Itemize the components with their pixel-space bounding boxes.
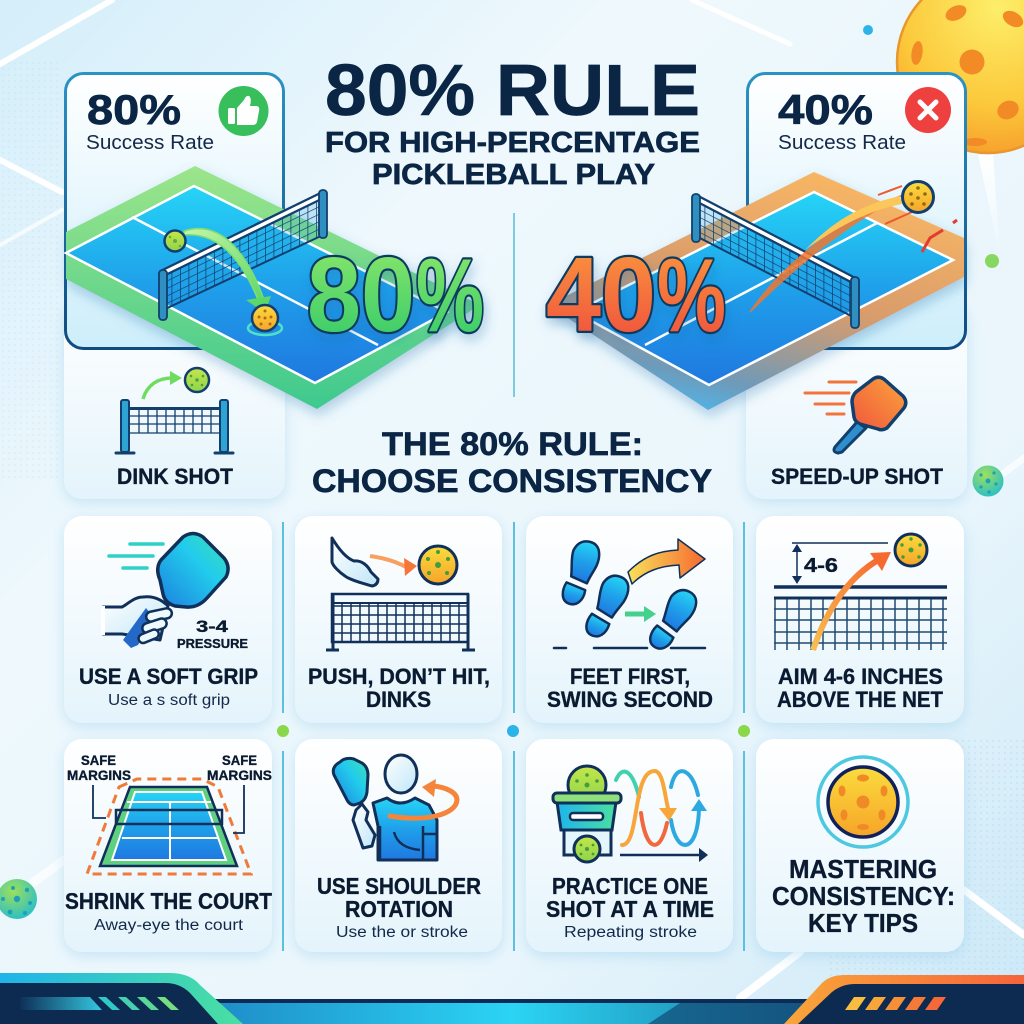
panel: shrink the court bbox=[64, 739, 272, 952]
heading: DINKS bbox=[366, 687, 431, 712]
label: 4-6: 4-6 bbox=[804, 555, 838, 577]
heading bbox=[772, 854, 955, 938]
heading bbox=[777, 664, 944, 712]
heading: SHOT AT A TIME bbox=[546, 896, 714, 922]
heading: ROTATION bbox=[345, 896, 453, 922]
label: 3-4: 3-4 bbox=[196, 617, 229, 636]
big figure: 40%: 40 bbox=[546, 236, 656, 354]
40% card figure: 40% bbox=[778, 86, 873, 133]
label: speed-up shot: SPEED-UP SHOT bbox=[771, 464, 944, 489]
label: pressure: PRESSURE bbox=[177, 636, 248, 651]
court: green safe side bbox=[66, 166, 480, 409]
panel: aim above the net bbox=[756, 516, 964, 723]
footer band bbox=[0, 973, 1024, 1024]
footer left accent bbox=[0, 973, 243, 1024]
panel: use shoulder rotation bbox=[295, 739, 502, 952]
panel: 80% success card bbox=[64, 74, 285, 499]
80% card figure: 80% bbox=[87, 86, 181, 133]
title: FOR HIGH-PERCENTAGE bbox=[325, 127, 700, 159]
ground line bbox=[554, 647, 705, 649]
caption: Use the or stroke bbox=[336, 924, 468, 941]
icon: player rotating shoulders bbox=[333, 755, 457, 860]
footer right accent bbox=[784, 975, 1024, 1024]
icon: footprints and arrows bbox=[560, 538, 701, 655]
label: left safe margins: SAFE bbox=[81, 752, 116, 768]
title bbox=[325, 51, 700, 191]
label: left safe margins bbox=[67, 752, 131, 783]
big figure: 80% bbox=[307, 236, 484, 354]
icon: court with safe margins bbox=[87, 779, 251, 874]
title: 80% RULE bbox=[325, 51, 700, 131]
panel: practice one shot at a time bbox=[526, 739, 733, 952]
ball: landed target bbox=[248, 305, 282, 335]
heading bbox=[317, 873, 481, 922]
heading: SHRINK THE COURT bbox=[65, 888, 272, 914]
decorative big pickleball bbox=[897, 0, 1024, 153]
80% card caption: Success Rate bbox=[86, 132, 214, 154]
heading: USE A SOFT GRIP bbox=[79, 664, 258, 689]
court: orange risky side bbox=[548, 172, 964, 410]
heading bbox=[546, 873, 714, 922]
icon: net with aim arrow bbox=[774, 534, 947, 650]
label: right safe margins bbox=[207, 752, 272, 783]
icon: hand pushing ball over net bbox=[326, 538, 475, 650]
panel: 40% failure card bbox=[746, 74, 967, 499]
caption: Use a s soft grip bbox=[108, 692, 230, 709]
heading: AIM 4-6 INCHES bbox=[778, 664, 943, 689]
caption: Repeating stroke bbox=[564, 924, 697, 941]
heading: ABOVE THE NET bbox=[777, 687, 944, 712]
net: right court bbox=[692, 194, 859, 328]
heading bbox=[308, 664, 490, 712]
panel: mastering consistency bbox=[756, 739, 964, 952]
title: PICKLEBALL PLAY bbox=[372, 159, 655, 191]
heading: KEY TIPS bbox=[808, 908, 918, 938]
dink trajectory arrow bbox=[184, 229, 271, 313]
speed-up trajectory bbox=[750, 186, 957, 312]
panel: feet first swing second bbox=[526, 516, 733, 723]
label: right safe margins: SAFE bbox=[222, 752, 257, 768]
label: left safe margins: MARGINS bbox=[67, 767, 131, 783]
panel: use a soft grip bbox=[64, 516, 272, 723]
icon: thumbs up bbox=[218, 86, 268, 136]
label: dink shot: DINK SHOT bbox=[117, 464, 234, 489]
big figure: 80%: % bbox=[416, 238, 484, 354]
subheading: CHOOSE CONSISTENCY bbox=[312, 463, 712, 499]
icon: ball with ring bbox=[818, 757, 908, 847]
icon: speed-up paddle bbox=[805, 377, 906, 453]
center divider bbox=[513, 213, 515, 397]
icon: curved orange arrow bbox=[628, 539, 705, 584]
ball: flying out bbox=[902, 182, 934, 212]
heading: PUSH, DON’T HIT, bbox=[308, 664, 490, 689]
panel: push don't hit dinks bbox=[295, 516, 502, 723]
big figure: 40% bbox=[546, 236, 726, 354]
heading: MASTERING bbox=[789, 854, 937, 884]
heading: PRACTICE ONE bbox=[552, 873, 708, 899]
subheading bbox=[312, 426, 712, 499]
caption: Away-eye the court bbox=[94, 917, 244, 934]
heading: USE SHOULDER bbox=[317, 873, 481, 899]
subheading: THE 80% RULE: bbox=[382, 426, 643, 462]
row dividers bbox=[282, 522, 745, 951]
icon: small green arrow bbox=[625, 606, 656, 622]
icon: red cross bbox=[905, 87, 951, 133]
40% card caption: Success Rate bbox=[778, 132, 906, 154]
heading: CONSISTENCY: bbox=[772, 881, 955, 911]
net: left court bbox=[159, 190, 327, 320]
heading bbox=[547, 664, 713, 712]
heading: FEET FIRST, bbox=[570, 664, 690, 689]
big figure: 40%: % bbox=[657, 238, 726, 354]
icon: ball machine and repeating waves bbox=[553, 766, 708, 862]
icon: hand holding paddle bbox=[103, 534, 228, 648]
heading: SWING SECOND bbox=[547, 687, 713, 712]
ball: lime start bbox=[164, 230, 186, 252]
label: right safe margins: MARGINS bbox=[207, 767, 272, 783]
icon: dink shot over net bbox=[116, 368, 233, 453]
big figure: 80%: 80 bbox=[307, 236, 415, 354]
